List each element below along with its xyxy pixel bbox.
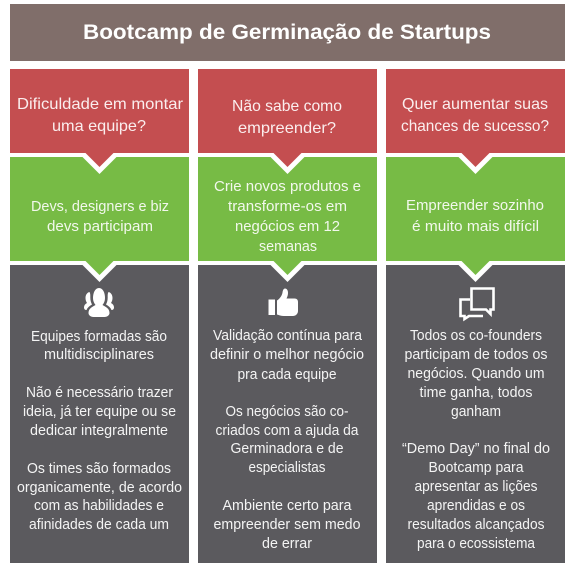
panel: column 3 bbox=[386, 69, 565, 563]
panel: column 1: multidisciplinares bbox=[44, 347, 154, 363]
title banner: Bootcamp de Germinação de Startups bbox=[83, 21, 491, 44]
panel: column 3: Bootcamp para bbox=[428, 460, 524, 476]
panel: column 3: Todos os co-founders bbox=[410, 328, 542, 344]
panel: column 2: de errar bbox=[262, 536, 312, 552]
panel: column 3: chances de sucesso? bbox=[401, 118, 549, 135]
panel: column 3: participam de todos os bbox=[404, 347, 548, 363]
panel: column 2: Validação contínua para bbox=[213, 328, 363, 344]
panel: column 2: empreender? bbox=[238, 120, 336, 137]
panel: column 1: Dificuldade em montar bbox=[17, 96, 184, 113]
title banner bbox=[10, 4, 565, 61]
panel: column 1: afinidades de cada um bbox=[29, 517, 169, 533]
panel: column 1: Não é necessário trazer bbox=[26, 385, 173, 401]
panel: column 1: devs participam bbox=[47, 218, 153, 235]
panel: column 3: apresentar as lições bbox=[414, 479, 538, 495]
panel: column 2: negócios em 12 bbox=[235, 218, 340, 235]
panel: column 3: resultados alcançados bbox=[408, 517, 544, 533]
panel: column 1 bbox=[10, 69, 189, 563]
panel: column 1: Devs, designers e biz bbox=[31, 198, 169, 215]
panel: column 2: empreender sem medo bbox=[214, 517, 360, 533]
panel: column 1: organicamente, de acordo bbox=[17, 480, 182, 496]
panel: column 3: ganham bbox=[451, 404, 501, 420]
panel: column 3: Quer aumentar suas bbox=[402, 96, 548, 113]
panel: column 1: ideia, já ter equipe ou se bbox=[23, 404, 176, 420]
panel: column 2: pra cada equipe bbox=[238, 367, 336, 383]
icon: chat bubbles bbox=[460, 288, 494, 319]
panel: column 1: uma equipe? bbox=[52, 118, 146, 135]
panel: column 2: criados com a ajuda da bbox=[216, 423, 359, 439]
panel: column 1: com as habilidades e bbox=[34, 498, 164, 514]
panel: column 2 bbox=[198, 69, 377, 563]
panel: column 2: Crie novos produtos e bbox=[214, 178, 361, 195]
panel: column 1: Os times são formados bbox=[27, 461, 171, 477]
panel: column 2: Não sabe como bbox=[232, 98, 342, 115]
panel: column 2: Germinadora e de bbox=[230, 441, 344, 457]
panel: column 3: para o ecossistema bbox=[417, 536, 536, 552]
panel: column 3: negócios. Quando um bbox=[408, 366, 544, 382]
panel: column 3: é muito mais difícil bbox=[412, 218, 539, 235]
panel: column 3: aprendidas e os bbox=[427, 498, 525, 514]
panel: column 2: definir o melhor negócio bbox=[210, 347, 364, 363]
panel: column 2: semanas bbox=[259, 238, 317, 255]
icon: thumbs up bbox=[268, 288, 298, 316]
panel: column 2: transforme-os em bbox=[228, 198, 347, 215]
panel: column 2: especialistas bbox=[248, 460, 326, 476]
panel: column 2: Ambiente certo para bbox=[222, 498, 352, 514]
panel: column 3: “Demo Day” no final do bbox=[402, 441, 550, 457]
panel: column 3: Empreender sozinho bbox=[406, 197, 544, 214]
panel: column 2: Os negócios são co- bbox=[226, 404, 349, 420]
panel: column 3: time ganha, todos bbox=[420, 385, 532, 401]
icon: people bbox=[84, 288, 114, 317]
panel: column 1: dedicar integralmente bbox=[30, 423, 168, 439]
panel: column 1: Equipes formadas são bbox=[31, 329, 167, 345]
